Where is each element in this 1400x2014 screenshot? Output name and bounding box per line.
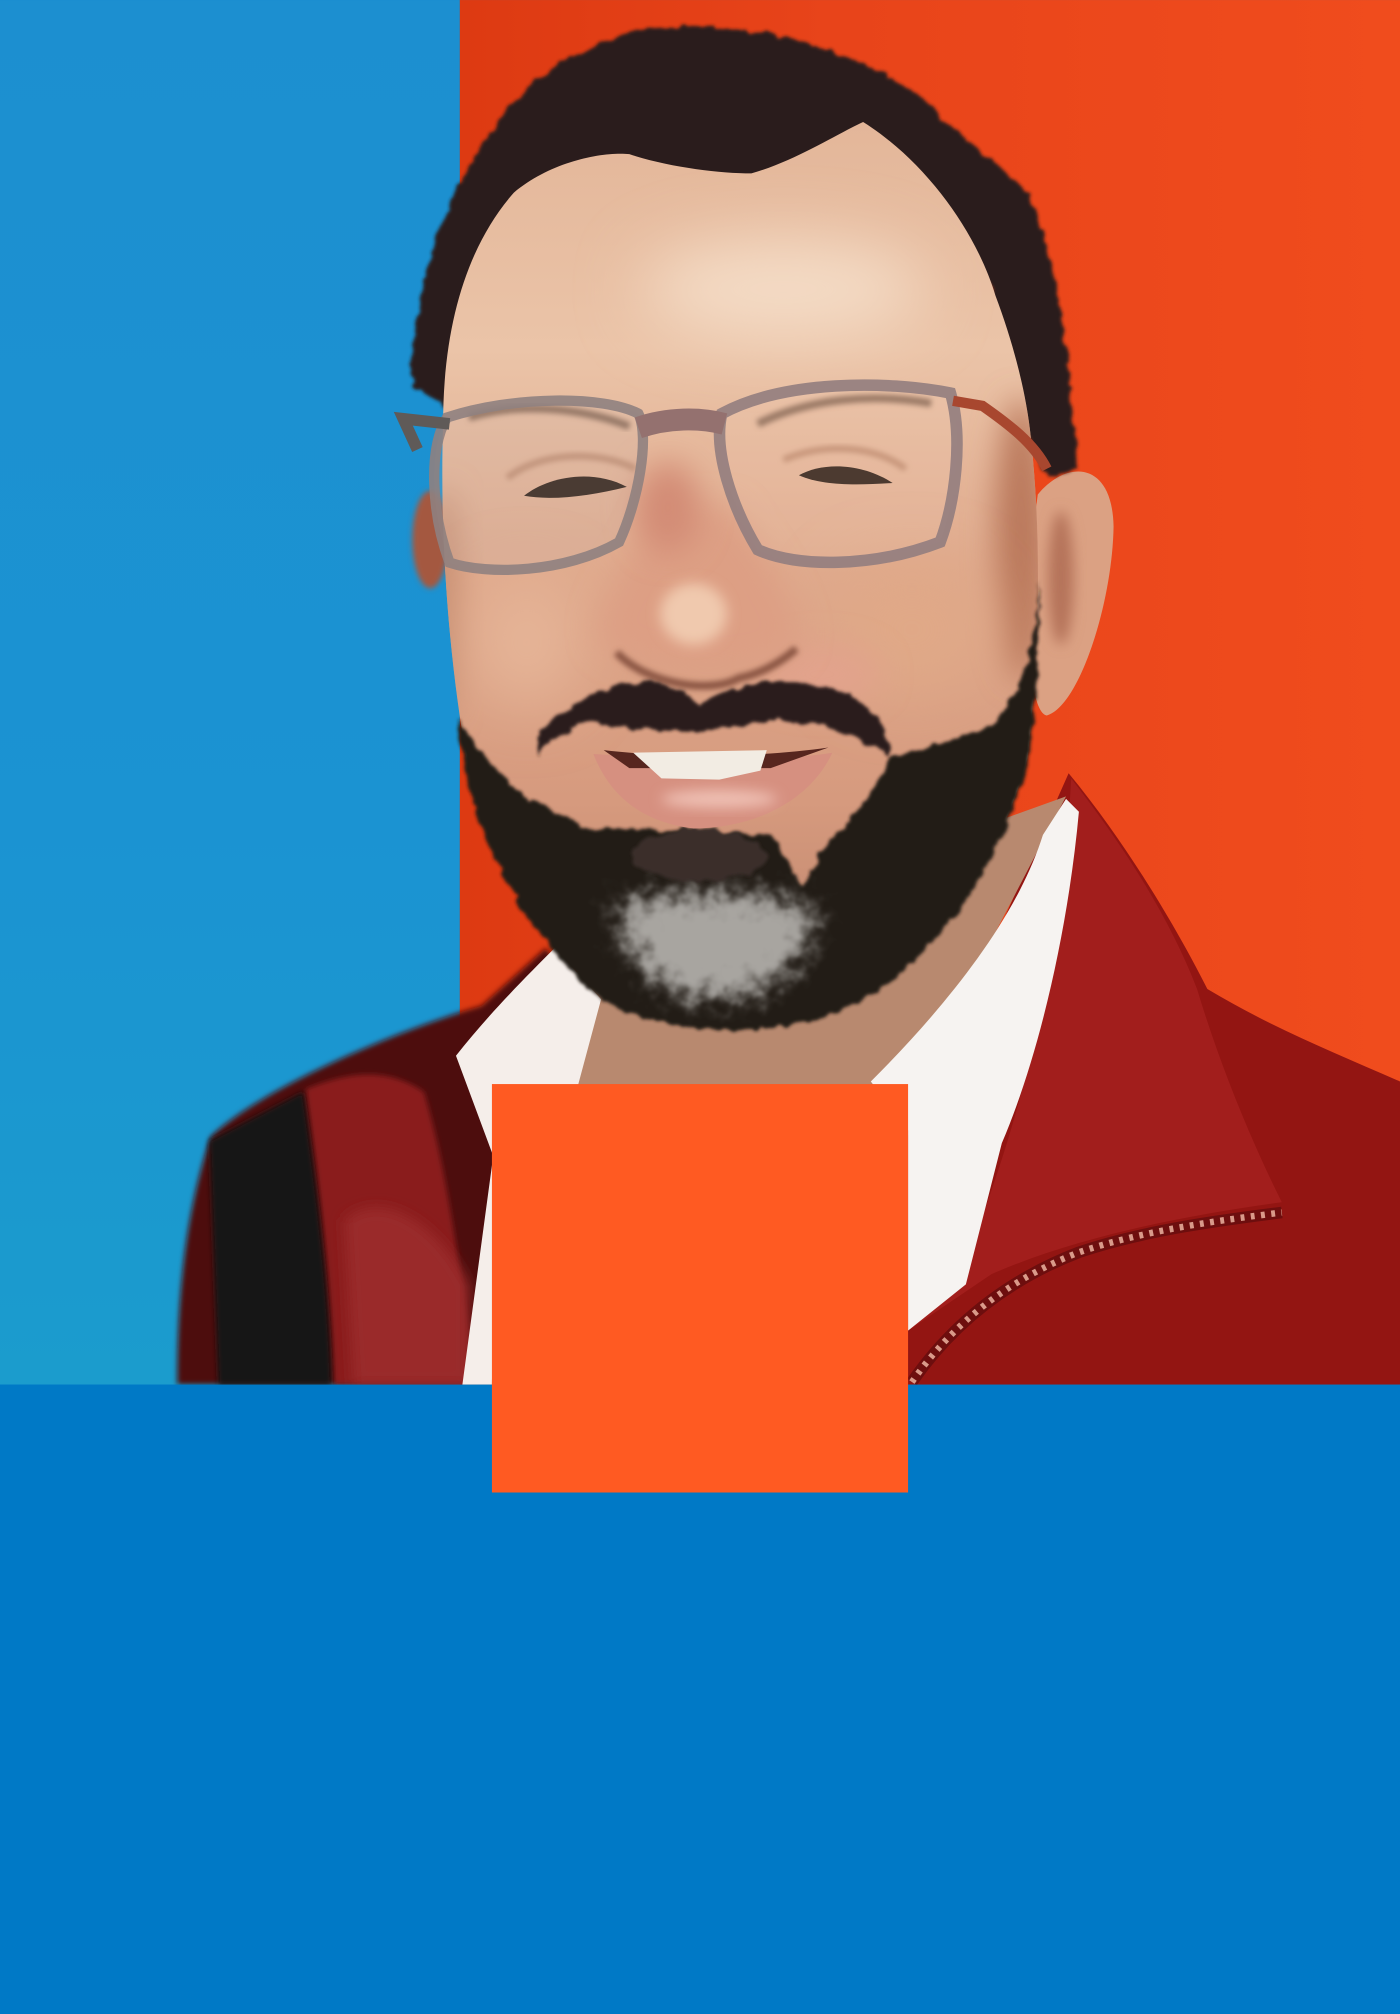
- jacket: right collar: [908, 778, 1282, 1331]
- glasses: bridge: [638, 419, 724, 428]
- eyelid: right: [783, 449, 906, 469]
- eyelid: left: [507, 456, 636, 478]
- eyes: [469, 398, 931, 498]
- jacket: zip teeth: [912, 1213, 1282, 1382]
- jacket: left highlight fold: [344, 1208, 469, 1385]
- hair: [411, 26, 1076, 478]
- glasses: right temple: [953, 401, 1047, 469]
- nose: shadow: [617, 649, 796, 686]
- jacket: zip: [912, 1213, 1282, 1382]
- brow: right: [758, 398, 931, 424]
- portrait infographic: [0, 0, 1400, 1492]
- glasses: left temple: [403, 419, 450, 450]
- beard: [457, 578, 1040, 1030]
- shirt: [456, 799, 1079, 1385]
- jacket: left sleeve: [306, 1075, 475, 1385]
- beard: grey chin: [617, 893, 816, 999]
- nose: highlight: [660, 583, 727, 645]
- eye: left: [524, 476, 627, 498]
- mouth surround flush: [764, 646, 880, 703]
- nose: [599, 462, 799, 686]
- beard: soul patch: [633, 830, 767, 881]
- face shading: [428, 240, 1047, 719]
- brow: left: [469, 409, 629, 426]
- face edge shade right: [995, 398, 1047, 681]
- ear: right: [1029, 472, 1114, 715]
- ear: inner shadow: [1048, 511, 1074, 645]
- eye: right: [799, 466, 893, 484]
- forehead highlight: [642, 240, 925, 338]
- jacket: right body: [899, 773, 1400, 1385]
- mouth: dark line: [604, 748, 828, 768]
- background: orange panel: [460, 0, 1400, 1385]
- jacket: [177, 773, 1400, 1385]
- lower panel: [0, 1385, 1400, 2014]
- mouth: teeth: [633, 750, 767, 780]
- mouth: lip shine: [661, 790, 777, 808]
- cheek tone right: [835, 565, 989, 694]
- nose: bridge redness: [636, 462, 700, 552]
- jacket: black strap: [209, 1092, 331, 1385]
- moustache: [537, 682, 891, 758]
- mouth: [593, 748, 832, 828]
- orange square: [492, 1084, 908, 1493]
- glasses: right lens: [720, 385, 957, 562]
- face: [442, 122, 1038, 1028]
- mouth: lower lip: [593, 753, 832, 828]
- glasses: left lens: [434, 401, 643, 570]
- jacket: left shoulder: [177, 948, 604, 1385]
- background: blue panel: [0, 0, 460, 1385]
- neck: [552, 796, 1066, 1117]
- shirt: left collar: [456, 948, 601, 1385]
- glasses: [403, 385, 1047, 570]
- cheek tone left: [471, 599, 574, 704]
- ear: left: [412, 491, 448, 588]
- shirt: right collar: [871, 799, 1079, 1331]
- face edge shade left: [442, 495, 466, 702]
